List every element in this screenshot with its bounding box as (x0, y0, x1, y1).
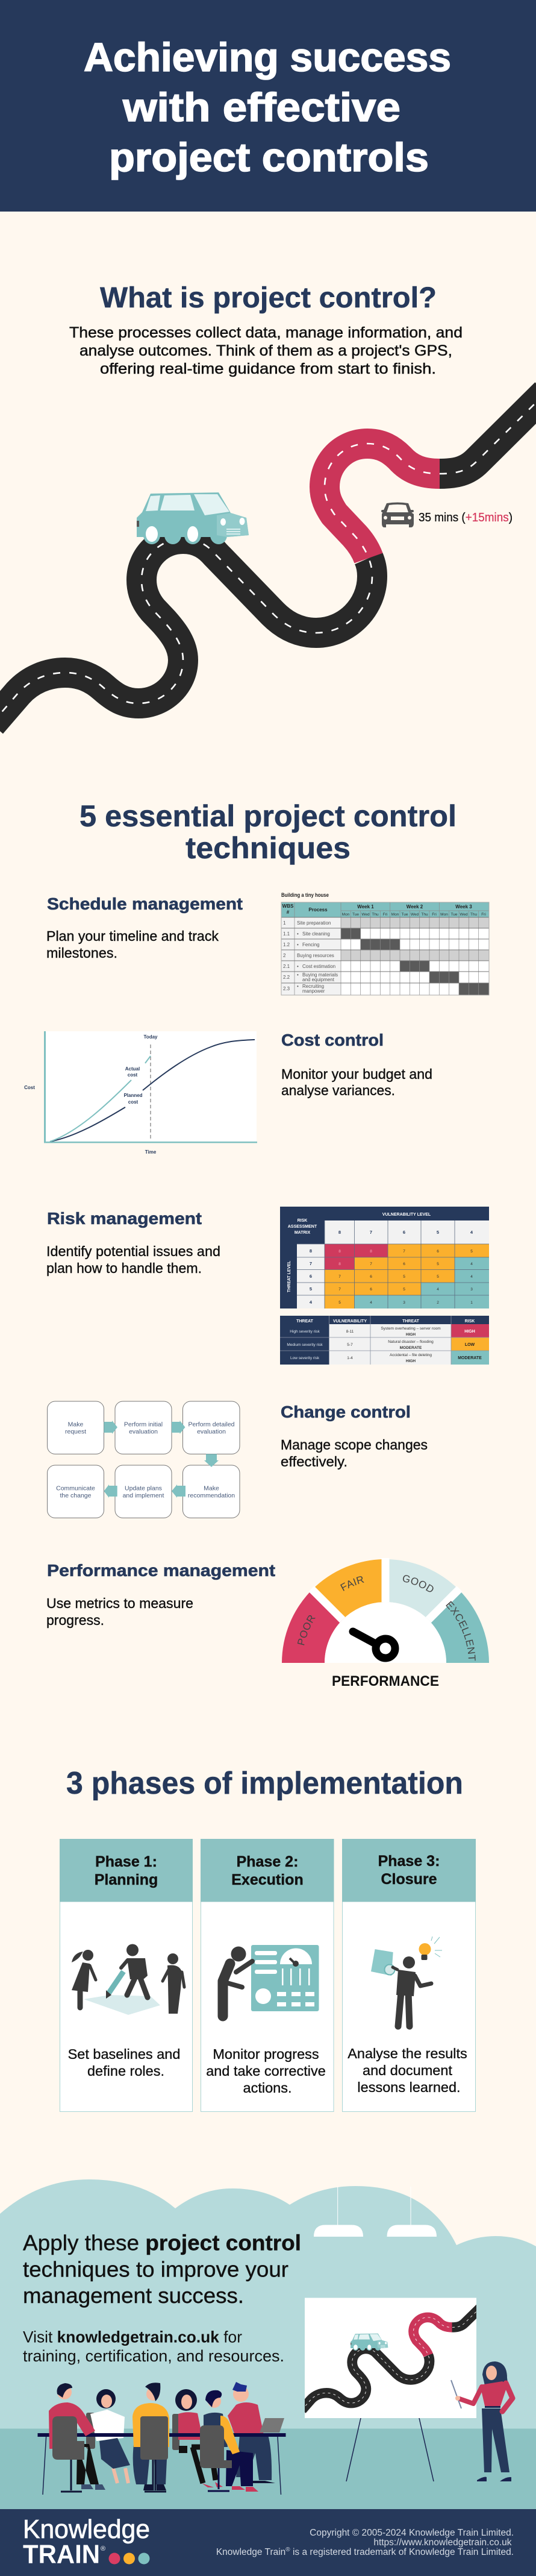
performance gauge: POOR (298, 1615, 316, 1645)
icon: teal car (137, 492, 249, 544)
gantt chart: 2.2 (283, 975, 290, 980)
gantt chart: Tue (451, 913, 458, 917)
change control flowchart: Make (204, 1485, 219, 1492)
risk assessment matrix: 7 (338, 1287, 341, 1292)
risk assessment matrix: 4 (310, 1299, 313, 1305)
copyright text: ® (285, 2546, 290, 2553)
risk assessment matrix: 4 (470, 1275, 473, 1279)
panel: risk management text: Risk management (47, 1209, 202, 1228)
panel: phase 2: Phase 2: (237, 1853, 298, 1870)
risk assessment matrix: 6 (370, 1287, 372, 1292)
gantt chart: 2.1 (283, 964, 290, 969)
panel: cost control text: Monitor your budget and (281, 1066, 432, 1082)
risk severity table: LOW (465, 1343, 475, 1347)
gantt chart: Recruiting (302, 984, 324, 989)
risk assessment matrix: 5 (310, 1286, 312, 1292)
heading: 3 phases of implementation: 3 phases of implementation (66, 1766, 463, 1801)
footer bar (0, 2509, 536, 2576)
panel: change control text: Change control (281, 1403, 411, 1421)
change control flowchart: Perform detailed (188, 1421, 235, 1428)
risk assessment matrix: 8 (338, 1262, 341, 1266)
gantt chart: 1.2 (283, 942, 290, 947)
performance gauge (282, 1558, 489, 1663)
logo: Knowledge Train: Knowledge (23, 2515, 150, 2544)
meeting table with seated team (37, 2382, 285, 2495)
gantt chart: Mon (440, 913, 448, 917)
gantt chart: • (297, 942, 299, 947)
risk severity table: 5-7 (347, 1343, 353, 1347)
risk assessment matrix: 7 (370, 1230, 372, 1235)
risk assessment matrix: 6 (310, 1274, 312, 1279)
cost line chart: cost (128, 1099, 139, 1105)
logo: Knowledge Train (23, 2515, 150, 2569)
gauge needle (353, 1632, 395, 1658)
phase 1 description: Set baselines and (68, 2046, 180, 2062)
heading: 5 essential project control techniques: 5 essential project control (79, 799, 457, 833)
risk severity table: THREAT (402, 1319, 420, 1324)
panel: phase 2 (201, 1839, 334, 2112)
cost line chart: Today (144, 1034, 158, 1040)
risk assessment matrix (280, 1207, 489, 1308)
panel: cost control text: Cost control (281, 1031, 384, 1049)
panel: phase 3: Phase 3: (378, 1853, 440, 1870)
heading: 5 essential project control techniques (79, 799, 457, 865)
gantt chart: Fri (383, 913, 387, 917)
man in red with laptop (228, 2382, 284, 2483)
risk severity table: HIGH (406, 1333, 416, 1337)
intro text block: These processes collect data, manage information, and (69, 324, 463, 341)
gantt chart: Tue (402, 913, 408, 917)
gantt chart: Site cleaning (302, 931, 330, 937)
table top (37, 2433, 285, 2495)
copyright text: is a registered trademark of Knowledge Train Limited. (290, 2547, 514, 2557)
gantt chart: Wed (361, 913, 370, 917)
gantt chart: # (287, 909, 290, 915)
panel: change control text: Manage scope changes (281, 1437, 428, 1453)
intro text block: analyse outcomes. Think of them as a project's GPS, (79, 342, 452, 359)
risk assessment matrix: 5 (403, 1287, 405, 1292)
risk assessment matrix: 5 (338, 1301, 341, 1305)
risk assessment matrix: VULNERABILITY LEVEL (382, 1213, 431, 1217)
panel: phase 1: Planning (95, 1871, 158, 1888)
phase 1 description: define roles. (87, 2063, 164, 2079)
risk assessment matrix: 3 (403, 1301, 405, 1305)
risk severity table: Accidental – file deleting (390, 1353, 432, 1357)
risk severity table: MODERATE (400, 1346, 422, 1350)
whiteboard with road diagram (302, 2298, 488, 2481)
risk assessment matrix: ASSESSMENT (288, 1225, 317, 1229)
risk assessment matrix: THREAT LEVEL (287, 1260, 291, 1292)
change control flowchart: request (65, 1428, 86, 1436)
gantt chart: Fri (432, 913, 437, 917)
traffic delay label: 35 mins (+15mins) (419, 511, 513, 524)
risk assessment matrix: 7 (370, 1262, 372, 1266)
gantt chart: 2.3 (283, 986, 290, 991)
gantt chart: Week 1 (357, 904, 374, 909)
copyright text (216, 2528, 514, 2557)
change control flowchart: Communicate (56, 1485, 95, 1492)
risk severity table: HIGH (464, 1330, 475, 1334)
icon: person with clipboard and lightbulb (371, 1937, 442, 2026)
risk assessment matrix: 1 (470, 1301, 473, 1305)
panel: risk management text: plan how to handle them. (46, 1260, 202, 1276)
logo: Knowledge Train: ® (101, 2545, 105, 2552)
risk assessment matrix: RISK (298, 1219, 307, 1223)
gantt chart: Fencing (302, 942, 319, 947)
icon: team planning (72, 1944, 184, 2015)
risk severity table: Medium severity risk (287, 1343, 323, 1347)
panel: phase 1: Phase 1: (95, 1853, 157, 1870)
phase 2 description: Monitor progress (213, 2046, 319, 2062)
gantt chart: • (297, 964, 299, 969)
call to action heading continued: management success. (23, 2283, 244, 2308)
change control flowchart: recommendation (188, 1492, 235, 1500)
person from behind in yellow (132, 2383, 169, 2492)
panel: risk management text: Identify potential issues and (46, 1243, 220, 1259)
phase 2 description: actions. (243, 2080, 291, 2096)
risk severity table: THREAT (296, 1319, 314, 1324)
seated woman in red with chair (172, 2389, 223, 2487)
call to action heading: Apply these project control (23, 2230, 301, 2255)
risk severity table: RISK (465, 1319, 475, 1324)
gantt chart: Buying materials (302, 972, 338, 978)
risk assessment matrix: 6 (403, 1262, 405, 1266)
risk assessment matrix: 6 (403, 1230, 405, 1235)
person from behind in navy and yellow (200, 2390, 258, 2492)
panel: change control text: effectively. (281, 1454, 347, 1469)
risk assessment matrix: 7 (310, 1261, 312, 1266)
gantt chart: Thu (372, 913, 379, 917)
risk severity table: MODERATE (458, 1356, 482, 1360)
icon: person at dashboard (223, 1945, 319, 2016)
risk severity table: High severity risk (290, 1330, 320, 1334)
copyright text: Knowledge Train (216, 2547, 285, 2557)
panel: phase 3: Closure (381, 1871, 437, 1888)
cost line chart: Planned (123, 1093, 143, 1098)
panel: phase 3 (342, 1839, 476, 2112)
cost line chart (24, 1031, 257, 1155)
risk assessment matrix: 8 (338, 1230, 341, 1235)
gantt chart (281, 892, 489, 995)
phase 3 description: Analyse the results (347, 2046, 467, 2061)
gantt chart: Process (308, 907, 328, 913)
gantt chart: • (297, 972, 299, 978)
gantt chart: Thu (470, 913, 477, 917)
risk assessment matrix: 7 (338, 1275, 341, 1279)
change control flowchart: Perform initial (124, 1421, 163, 1428)
panel: schedule management text: Plan your timeline and track (46, 928, 219, 944)
visit website text: Visit knowledgetrain.co.uk for (23, 2328, 242, 2346)
change control flowchart: evaluation (197, 1428, 226, 1436)
risk assessment matrix: 2 (437, 1301, 439, 1305)
risk assessment matrix: 5 (470, 1249, 473, 1254)
panel: schedule management text (46, 894, 243, 961)
risk assessment matrix: 4 (437, 1287, 439, 1292)
risk severity table: Natural disaster – flooding (388, 1340, 434, 1344)
gantt chart: Mon (391, 913, 399, 917)
risk assessment matrix: 5 (437, 1275, 439, 1279)
gantt chart: Thu (421, 913, 428, 917)
header banner with title: Achieving success (84, 35, 451, 80)
risk severity table (280, 1316, 489, 1365)
logo: Knowledge Train: TRAIN (23, 2540, 100, 2569)
change control flowchart: the change (60, 1492, 92, 1500)
phase 3 description (347, 2046, 467, 2095)
performance gauge: FAIR (340, 1576, 364, 1591)
risk severity table: VULNERABILITY (333, 1319, 367, 1324)
risk assessment matrix: MATRIX (294, 1231, 310, 1235)
risk assessment matrix: 5 (403, 1275, 405, 1279)
risk severity table: HIGH (406, 1359, 416, 1363)
change control flowchart (47, 1401, 240, 1518)
risk assessment matrix: 7 (403, 1249, 405, 1254)
gantt chart: and equipment (302, 977, 335, 982)
heading: 5 essential project control techniques: techniques (185, 831, 351, 865)
panel: cost control text: analyse variances. (281, 1082, 395, 1098)
cost line chart: Time (145, 1149, 157, 1155)
risk severity table: Low severity risk (290, 1356, 320, 1360)
phase 2 description: and take corrective (206, 2063, 326, 2079)
icon: traffic car (381, 503, 414, 527)
risk assessment matrix: 4 (470, 1262, 473, 1266)
gantt chart: Building a tiny house (281, 892, 329, 898)
header banner with title: project controls (109, 135, 429, 180)
pendant lamps (314, 2187, 437, 2237)
risk assessment matrix: 8 (338, 1249, 341, 1254)
gantt chart: Tue (352, 913, 359, 917)
gantt chart: • (297, 931, 299, 937)
panel: phase 1 (60, 1839, 193, 2112)
risk severity table: System overheating – server room (381, 1327, 441, 1331)
gantt chart: 1.1 (283, 931, 290, 937)
phase 1 description (68, 2046, 180, 2079)
gantt chart: Mon (342, 913, 350, 917)
risk assessment matrix: 8 (310, 1248, 312, 1254)
change control flowchart: and implement (123, 1492, 164, 1500)
risk assessment matrix: 6 (437, 1249, 439, 1254)
gantt chart: manpower (302, 988, 325, 994)
cost line chart: Actual (125, 1066, 140, 1072)
panel: schedule management text: Schedule management (47, 894, 243, 913)
risk assessment matrix: 4 (370, 1301, 372, 1305)
gantt chart: Cost estimation (302, 964, 335, 969)
illustration: winding road with car (0, 393, 536, 724)
risk assessment matrix: 4 (470, 1230, 473, 1235)
presenter woman (451, 2361, 513, 2481)
risk assessment matrix: 6 (370, 1275, 372, 1279)
gantt chart: 2 (283, 953, 286, 958)
panel: performance management text: Use metrics to measure (46, 1595, 193, 1611)
panel: risk management text (46, 1209, 220, 1276)
cost line chart: Cost (24, 1085, 35, 1090)
gantt chart: Wed (460, 913, 468, 917)
risk severity table: 1-4 (347, 1356, 353, 1360)
man from behind in red (49, 2383, 105, 2492)
header banner with title (0, 0, 536, 212)
phase 2 description (206, 2046, 326, 2096)
heading: what is project control: What is project control? (100, 282, 437, 314)
risk assessment matrix: 5 (437, 1230, 439, 1235)
gantt chart: Week 3 (455, 904, 472, 909)
gantt chart: Site preparation (297, 920, 331, 926)
header banner with title: with effective (122, 85, 400, 130)
call to action heading continued: techniques to improve your (23, 2257, 288, 2282)
risk severity table: 8-11 (346, 1330, 354, 1334)
copyright text: Copyright © 2005-2024 Knowledge Train Limited. (310, 2528, 514, 2538)
change control flowchart: evaluation (129, 1428, 158, 1436)
visit website text (23, 2328, 284, 2365)
performance gauge: GOOD (403, 1575, 434, 1592)
panel: change control text (281, 1403, 428, 1469)
phase 3 description: lessons learned. (357, 2079, 461, 2095)
visit website text: training, certification, and resources. (23, 2347, 284, 2365)
intro text block: offering real-time guidance from start to finish. (100, 360, 436, 377)
gantt chart: WBS (282, 903, 294, 909)
risk assessment matrix: 3 (470, 1287, 473, 1292)
panel: schedule management text: milestones. (46, 945, 117, 961)
copyright text: https://www.knowledgetrain.co.uk (373, 2537, 512, 2548)
performance gauge: EXCELLENT (446, 1601, 476, 1661)
intro text block (69, 324, 463, 377)
gauge caption: PERFORMANCE (332, 1673, 439, 1689)
panel: cost control text (281, 1031, 432, 1098)
gantt chart: • (297, 984, 299, 989)
background: hills and floor (0, 2179, 536, 2510)
call to action heading continued (23, 2257, 288, 2308)
panel: phase 2: Execution (231, 1871, 304, 1888)
risk assessment matrix: 8 (370, 1249, 372, 1254)
gantt chart: Wed (411, 913, 419, 917)
change control flowchart: Make (68, 1421, 83, 1428)
panel: performance management text: Performance management (47, 1561, 275, 1580)
gantt chart: Week 2 (407, 904, 423, 909)
risk assessment matrix: 5 (437, 1262, 439, 1266)
gantt chart: Fri (481, 913, 486, 917)
panel: performance management text (46, 1561, 275, 1628)
change control flowchart: Update plans (125, 1485, 162, 1492)
seated woman in white shirt (86, 2389, 130, 2483)
panel: performance management text: progress. (46, 1612, 104, 1628)
phase 3 description: and document (363, 2062, 452, 2078)
gantt chart: Buying resources (297, 953, 334, 958)
cost line chart: cost (128, 1072, 138, 1078)
gantt chart: 1 (283, 920, 286, 926)
